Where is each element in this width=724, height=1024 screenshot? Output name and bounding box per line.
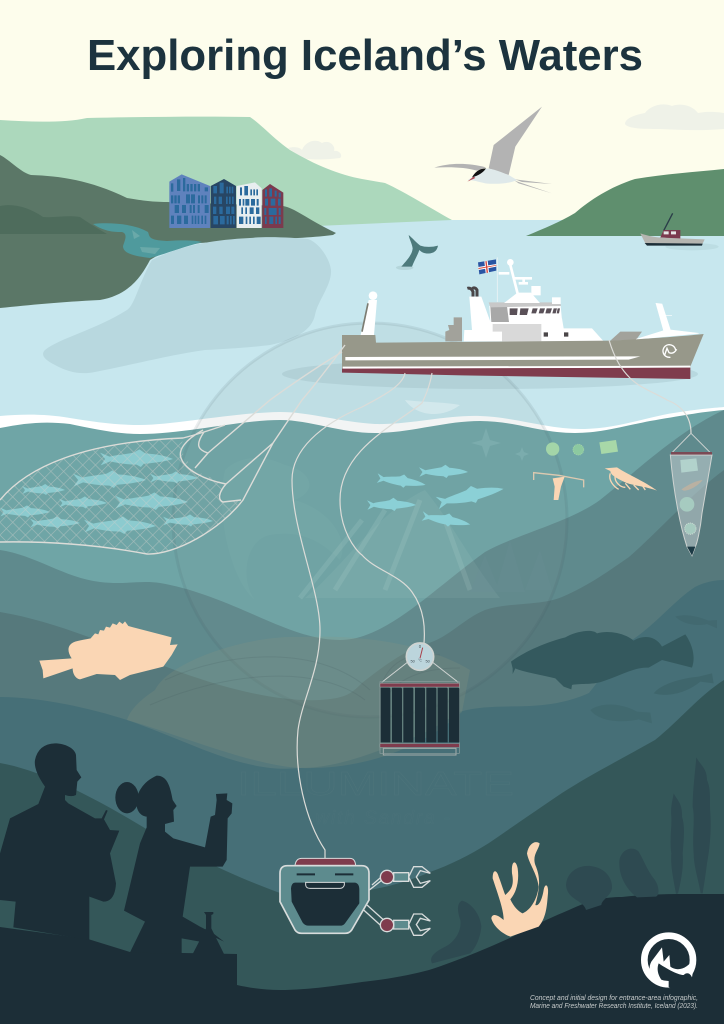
plankton net (670, 433, 712, 556)
superstructure (464, 297, 604, 341)
diatom disc (546, 442, 559, 456)
house: white (237, 182, 262, 228)
capelin shoal (367, 465, 505, 530)
radar mast (499, 259, 541, 302)
net outline (0, 345, 345, 554)
credit text: Concept and initial design for entrance-area infographic, (530, 995, 698, 1002)
cod silhouette (511, 631, 694, 689)
house: blue (169, 174, 210, 228)
phytoplankton (546, 440, 618, 456)
faint distant fish (590, 615, 717, 723)
underwater layer 4 (0, 580, 724, 1024)
grey deck block (445, 317, 462, 341)
krill (605, 467, 657, 491)
cloud right (625, 104, 724, 130)
research trawler (342, 257, 704, 379)
coral (491, 842, 548, 937)
female scientist (115, 776, 232, 954)
wave surface band (0, 407, 724, 434)
watermark emblem (127, 323, 567, 829)
thermometer dial (406, 643, 434, 670)
herring shoal (0, 449, 213, 534)
icelandic flag (478, 257, 497, 302)
underwater layer 1 (0, 408, 724, 1024)
underwater layer 2 (0, 410, 724, 1024)
ROV lower arm (364, 905, 430, 935)
watermark byline: - with Sandra - (300, 808, 450, 829)
ROV upper arm (369, 867, 430, 890)
redfish (39, 621, 178, 680)
kelp (671, 757, 711, 894)
sea surface (0, 220, 724, 435)
title: Exploring Iceland’s Waters (87, 31, 643, 80)
underwater layer 3 (0, 470, 724, 1024)
watermark wordmark: ILLUMINATE (237, 765, 514, 802)
thermometer dial: °C (418, 659, 422, 663)
thermometer dial: 0 (419, 644, 422, 649)
arctic tern (434, 107, 552, 193)
ROV body (280, 858, 369, 933)
thermometer dial: 50 (425, 658, 431, 663)
round plankton (573, 444, 584, 455)
mountain: right green (526, 169, 724, 236)
hull stripes (342, 356, 690, 379)
small fishing boat (640, 213, 719, 250)
river (93, 223, 202, 258)
ship reflection on water (282, 359, 698, 389)
left headland (0, 155, 336, 308)
stern mast (361, 291, 377, 335)
sponges (566, 849, 659, 910)
underwater layer 5 (0, 680, 724, 1024)
CTD water sampler (380, 643, 459, 755)
credit text: Marine and Freshwater Research Institute, Iceland (2023). (530, 1003, 698, 1010)
male scientist (0, 743, 119, 940)
dark mound (0, 205, 107, 234)
lab flask (193, 912, 224, 954)
hull (342, 334, 704, 378)
copepod (534, 473, 584, 500)
thermometer dial: 50 (410, 658, 416, 663)
trawl net with herring (0, 345, 345, 557)
funnels (467, 288, 477, 297)
credit text (530, 995, 698, 1010)
cloud left (288, 141, 341, 160)
mountain: pale green (0, 117, 452, 240)
house: navy (211, 179, 236, 228)
square diatom (599, 440, 618, 454)
pale lagoon (43, 237, 331, 373)
reykjavik houses (169, 174, 283, 228)
net mesh (0, 435, 245, 557)
bottle rack (380, 682, 459, 755)
ROV robot (280, 858, 430, 935)
research institute logo (644, 936, 695, 988)
seabed (0, 894, 724, 1024)
house: maroon (262, 184, 283, 228)
whale tail (396, 235, 438, 270)
ship ropes (292, 340, 691, 858)
bow mast and gear (610, 303, 699, 341)
sea cucumber (431, 901, 481, 963)
hull logo (662, 344, 677, 358)
